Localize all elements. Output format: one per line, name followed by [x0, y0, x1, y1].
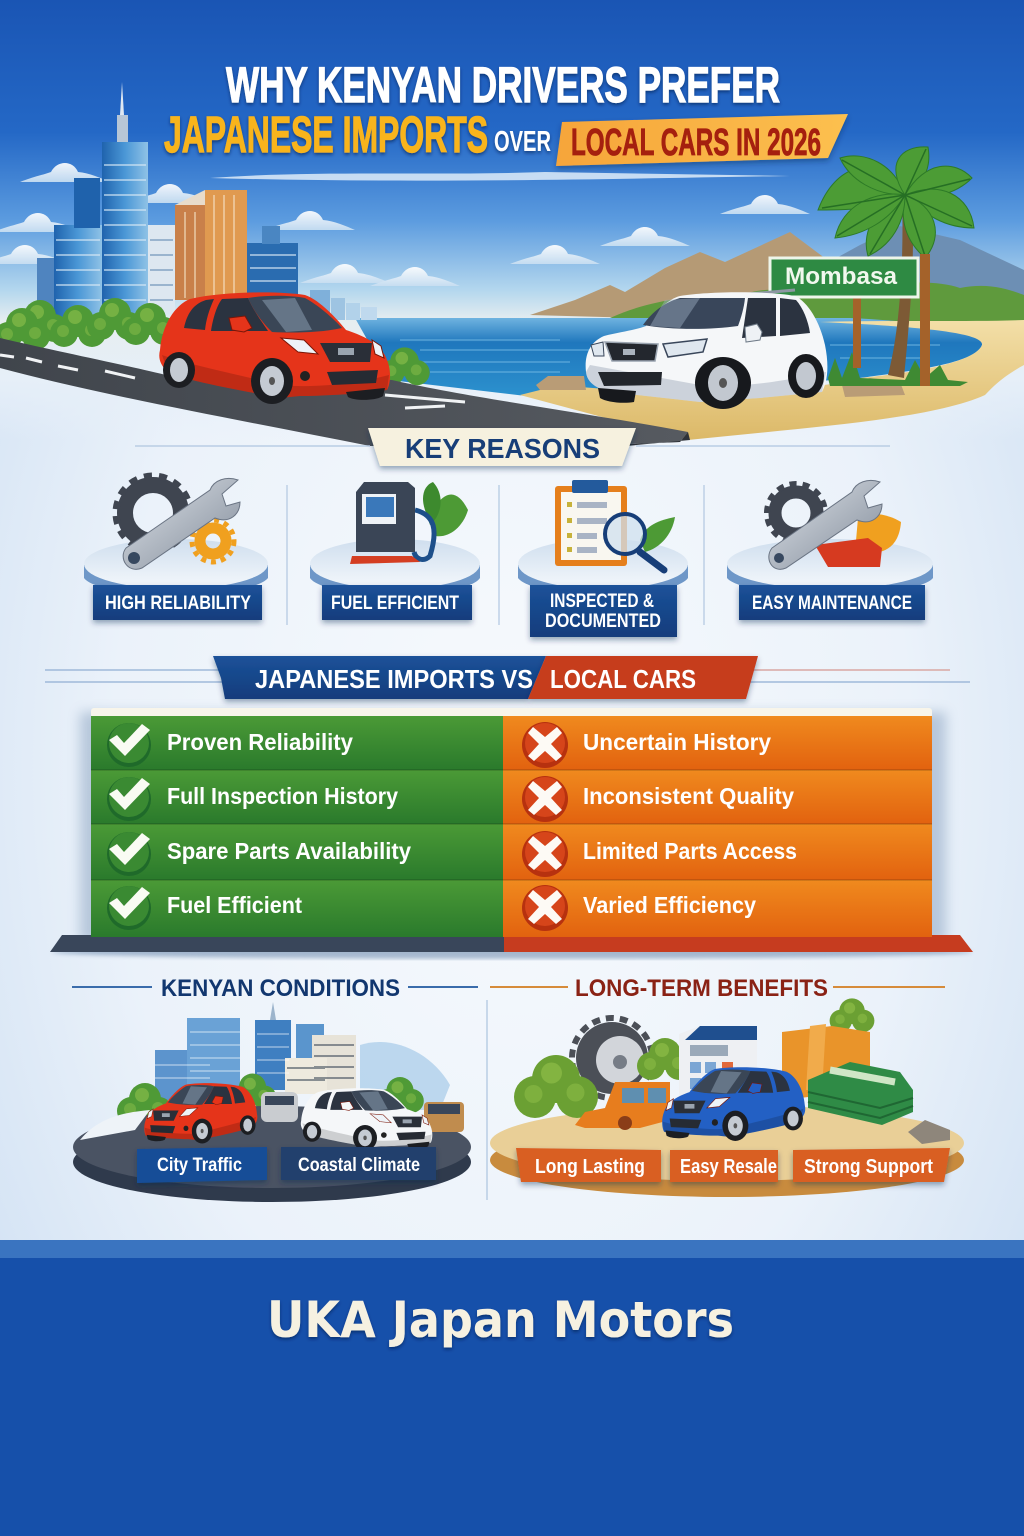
label: strong support: Strong Support — [804, 1156, 933, 1178]
road — [0, 338, 690, 455]
right column: local cars — [503, 716, 932, 937]
row: spare parts availability: Spare Parts Availability — [167, 838, 411, 864]
heading: KENYAN CONDITIONS — [161, 975, 400, 1002]
cash stack — [808, 1062, 913, 1125]
comparison table — [50, 708, 973, 959]
platform — [310, 539, 480, 594]
label: coastal climate — [281, 1147, 436, 1180]
row: spare parts availability — [91, 824, 503, 880]
orange pickup — [575, 1082, 670, 1130]
panel: Kenyan conditions — [72, 975, 478, 1202]
title underline swoosh — [210, 172, 790, 181]
sky — [0, 0, 1024, 440]
road platform — [73, 1106, 471, 1202]
footer brand name: UKA Japan Motors — [267, 1291, 734, 1349]
label — [322, 585, 472, 620]
label: strong support — [793, 1148, 950, 1182]
bushes — [0, 298, 430, 385]
label: city traffic: City Traffic — [157, 1155, 242, 1176]
label — [93, 585, 262, 620]
label: INSPECTED & — [550, 591, 654, 612]
title banner: local cars in 2026 — [556, 114, 848, 166]
row: full inspection history: Full Inspection History — [167, 783, 398, 809]
table base — [50, 712, 973, 959]
label — [739, 585, 925, 620]
sea — [355, 318, 982, 400]
rocks — [536, 376, 905, 397]
red car — [159, 292, 390, 404]
white car small — [301, 1088, 432, 1151]
divider between lower panels — [486, 1000, 488, 1200]
reason 2: fuel efficient — [310, 482, 480, 620]
row: proven reliability — [91, 716, 503, 770]
key reasons heading: KEY REASONS — [405, 433, 600, 464]
title: Japanese imports: JAPANESE IMPORTS — [164, 106, 488, 163]
label: easy resale — [670, 1150, 778, 1182]
blue car — [662, 1067, 805, 1141]
bushes — [514, 998, 874, 1118]
clouds — [0, 163, 810, 286]
label — [530, 585, 677, 637]
title: over: OVER — [494, 126, 551, 158]
label: long lasting: Long Lasting — [535, 1156, 645, 1178]
beach — [520, 320, 1024, 440]
sand platform — [490, 1105, 964, 1197]
left column: Japanese imports — [91, 716, 503, 937]
icon: tools and parts — [767, 480, 901, 569]
city illustration — [106, 1002, 450, 1160]
row: varied efficiency — [503, 880, 932, 937]
heading: LONG-TERM BENEFITS — [575, 975, 828, 1002]
hero scene: city to coast — [0, 0, 1024, 455]
skyline — [37, 82, 377, 320]
label: coastal climate: Coastal Climate — [298, 1155, 420, 1176]
comparison heading ribbon — [45, 656, 970, 699]
label: city traffic — [137, 1147, 267, 1183]
reason dividers — [287, 485, 704, 625]
row: uncertain history — [503, 716, 932, 770]
title — [164, 57, 848, 181]
label: DOCUMENTED — [545, 611, 661, 632]
Mombasa sign: Mombasa — [785, 263, 898, 290]
label: long lasting — [516, 1148, 661, 1182]
icon: fuel pump with leaves — [350, 482, 468, 564]
background cars — [261, 1092, 464, 1132]
reason 3: inspected and documented — [518, 480, 688, 637]
row: proven reliability: Proven Reliability — [167, 729, 353, 755]
table top edge — [91, 708, 932, 718]
Mombasa sign — [770, 254, 930, 386]
white SUV — [586, 290, 827, 409]
row: uncertain history: Uncertain History — [583, 729, 771, 755]
platform — [84, 539, 268, 594]
row: limited parts access — [503, 824, 932, 880]
comparison heading ribbon: LOCAL CARS — [550, 664, 696, 694]
calculator — [679, 1026, 757, 1105]
icon: clipboard and magnifier — [555, 480, 675, 570]
label: easy resale: Easy Resale — [680, 1156, 777, 1178]
row: fuel efficient — [91, 880, 503, 937]
row: inconsistent quality: Inconsistent Quality — [583, 783, 794, 809]
row: inconsistent quality — [503, 770, 932, 824]
panel: long-term benefits — [490, 975, 964, 1197]
key reasons heading — [135, 428, 890, 466]
title line 1: WHY KENYAN DRIVERS PREFER — [226, 57, 780, 113]
reason 4: easy maintenance — [727, 480, 933, 620]
row: fuel efficient: Fuel Efficient — [167, 892, 302, 918]
platform — [727, 539, 933, 594]
reason 1: high reliability — [84, 476, 268, 620]
row: full inspection history — [91, 770, 503, 824]
row: limited parts access: Limited Parts Access — [583, 838, 797, 864]
benefit objects — [514, 998, 950, 1144]
platform — [518, 539, 688, 594]
footer band — [0, 1240, 1024, 1536]
palm tree — [818, 147, 974, 378]
label: HIGH RELIABILITY — [105, 593, 251, 614]
rock — [908, 1120, 950, 1144]
title banner: local cars in 2026: LOCAL CARS IN 2026 — [571, 122, 821, 164]
tire — [572, 1018, 652, 1098]
mountains — [530, 226, 1024, 330]
boxes — [782, 1024, 870, 1100]
comparison heading ribbon: JAPANESE IMPORTS VS — [255, 664, 533, 694]
red car small — [144, 1083, 257, 1143]
label: FUEL EFFICIENT — [331, 593, 459, 614]
icon: gear and wrench — [116, 476, 240, 569]
row: varied efficiency: Varied Efficiency — [583, 892, 756, 918]
label: EASY MAINTENANCE — [752, 593, 912, 614]
grass — [828, 352, 968, 386]
